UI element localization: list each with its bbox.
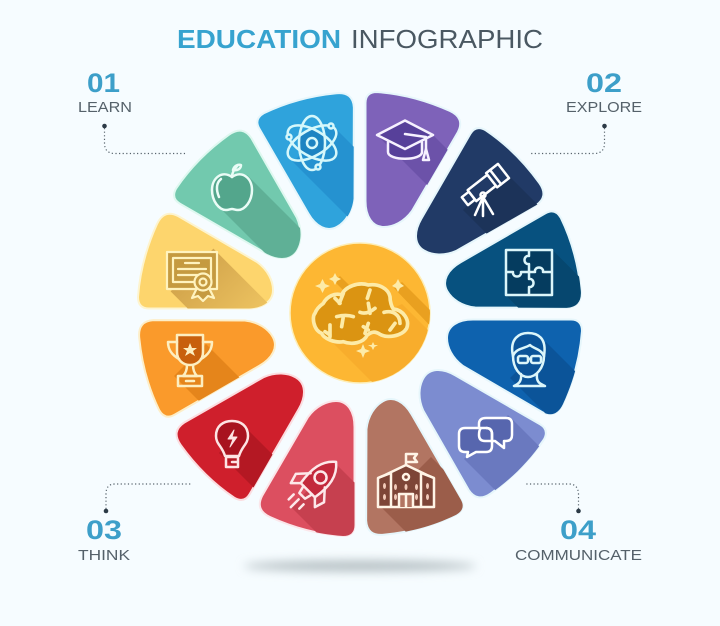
icon: telescope — [459, 164, 509, 216]
segment: light bulb — [176, 372, 305, 501]
icon: school building — [378, 454, 434, 507]
segment: person — [446, 318, 583, 415]
icon: trophy — [168, 335, 212, 386]
segment: apple — [173, 130, 302, 259]
icon: atom — [282, 116, 342, 170]
floor shadow — [244, 560, 476, 572]
segment: puzzle — [444, 210, 582, 309]
label: 02 explore: EXPLORE — [566, 100, 642, 116]
title: EDUCATION — [177, 24, 341, 54]
segment: graduation cap — [364, 91, 461, 228]
icon: chat bubbles — [459, 418, 512, 457]
segment: chat — [418, 369, 547, 498]
icon: brain — [313, 284, 408, 343]
icon: rocket — [277, 448, 350, 521]
segment: telescope — [415, 127, 544, 256]
label: 02 explore: 02 — [586, 68, 622, 98]
icon: certificate — [167, 252, 217, 301]
label: 04 communicate: COMMUNICATE — [515, 548, 642, 564]
segment: trophy — [138, 319, 276, 418]
icon: person with glasses — [512, 333, 545, 386]
icon: apple — [212, 165, 252, 210]
label: 03 think — [78, 484, 192, 564]
label: 01 learn — [78, 68, 187, 154]
segment: certificate — [137, 212, 274, 310]
label: 03 think: 03 — [86, 515, 122, 545]
label: 03 think: THINK — [78, 548, 130, 564]
label: 02 explore — [530, 68, 642, 154]
label: 04 communicate: 04 — [560, 515, 596, 545]
segment: school — [365, 398, 464, 536]
icon: graduation cap — [377, 120, 433, 160]
title: INFOGRAPHIC — [351, 24, 543, 54]
icon: puzzle — [506, 250, 552, 295]
label: 01 learn: LEARN — [78, 100, 132, 116]
label: 04 communicate — [515, 484, 642, 564]
segment: rocket — [258, 400, 356, 537]
icon: light bulb — [216, 421, 248, 467]
icon: sparkles — [315, 273, 404, 358]
label: 01 learn: 01 — [87, 68, 120, 98]
center circle: brain — [289, 242, 431, 384]
segment: atom — [256, 92, 355, 230]
title — [177, 24, 543, 54]
